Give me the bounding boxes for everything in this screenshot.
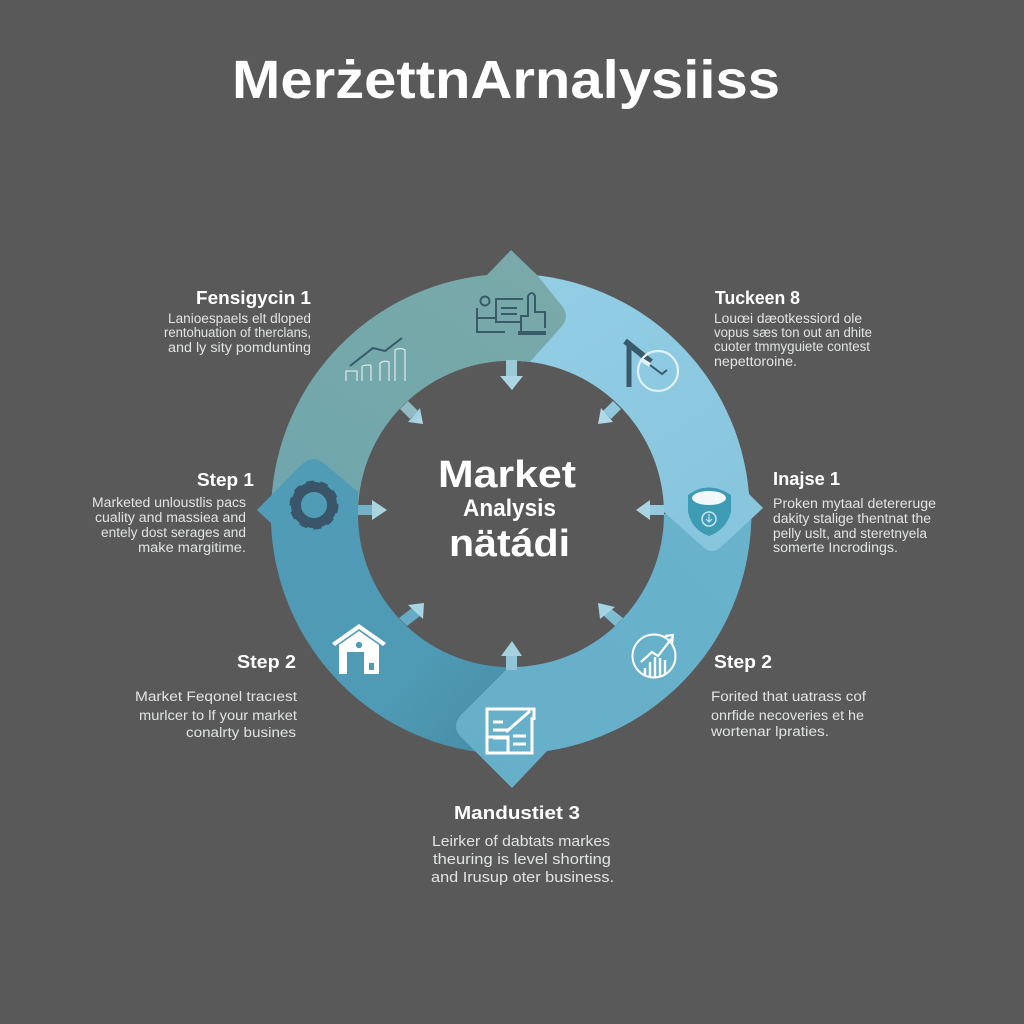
text block: middle right: dakity stalige thentnat the: [773, 511, 931, 526]
center label: [438, 454, 576, 565]
icon: house: [332, 624, 386, 674]
arrow: bottom left: [399, 603, 424, 626]
icon: cup: [688, 488, 731, 536]
text block: middle left: [92, 470, 254, 555]
icon: growth chart in circle: [632, 634, 676, 678]
text block: lower right: Step 2: [714, 652, 772, 672]
text block: upper right: [714, 288, 872, 369]
icon: tool and dial: [625, 341, 678, 391]
text block: upper right: Louœi dæotkessiord ole: [714, 311, 862, 326]
title: MerżettnArnalysiiss: [232, 50, 780, 110]
text block: middle left: Step 1: [197, 470, 254, 490]
text block: lower left: Step 2: [237, 652, 296, 672]
text block: middle left: entely dost serages and: [101, 525, 246, 540]
arrow: bottom: [501, 641, 522, 670]
text block: middle right: Inajse 1: [773, 469, 840, 489]
circular process ring: [257, 250, 763, 788]
gear diamond overlap: [257, 459, 358, 530]
text block: upper right: vopus sæs ton out an dhite: [714, 325, 872, 340]
text block: lower left: Market Feqonel tracıest: [135, 689, 297, 704]
icon: report document: [487, 709, 534, 753]
text block: lower right: [710, 652, 866, 739]
icon: bar chart: [346, 338, 405, 381]
text block: upper right: cuoter tmmyguiete contest: [714, 339, 870, 354]
text block: bottom: [431, 803, 614, 886]
arrow: top: [500, 360, 523, 390]
text block: middle left: cuality and massiea and: [95, 510, 246, 525]
text block: lower right: wortenar lpraties.: [710, 724, 829, 739]
text block: lower left: murlcer to lf your market: [139, 708, 297, 723]
center label: Market: [438, 454, 576, 496]
text block: upper right: Tuckeen 8: [715, 288, 800, 308]
text block: bottom: Mandustiet 3: [454, 803, 580, 823]
text block: bottom: and Irusup oter business.: [431, 869, 614, 886]
text block: upper left: Lanioespaels elt dloped: [168, 311, 311, 326]
text block: middle right: Proken mytaal detereruge: [773, 496, 936, 511]
segment: lower left: [257, 459, 520, 754]
text block: upper left: and ly sity pomdunting: [168, 340, 311, 355]
center label: nätádi: [449, 523, 570, 565]
text block: middle right: somerte Incrodings.: [773, 540, 898, 555]
arrow: right: [636, 500, 664, 520]
segment: upper right: [520, 274, 763, 551]
text block: middle left: make margitime.: [138, 540, 246, 555]
icon: document and hand: [477, 293, 546, 333]
arrow: top left: [400, 401, 423, 424]
segment: upper left: [271, 250, 566, 514]
text block: bottom: Leirker of dabtats markes: [432, 833, 610, 850]
text block: lower left: [135, 652, 297, 740]
arrow: bottom right: [598, 603, 623, 626]
icon: gear: [292, 482, 336, 528]
segment: lower right: [456, 500, 751, 788]
center label: Analysis: [463, 495, 556, 522]
text block: middle right: [773, 469, 936, 555]
text block: lower right: onrfide necoveries et he: [711, 708, 864, 723]
text block: upper left: [164, 288, 311, 355]
text block: lower right: Forited that uatrass cof: [711, 689, 866, 704]
text block: middle left: Marketed unloustlis pacs: [92, 495, 246, 510]
text block: lower left: conalrty busines: [186, 725, 296, 740]
text block: upper right: nepettoroine.: [714, 354, 797, 369]
text block: upper left: Fensigycin 1: [196, 288, 311, 308]
text block: upper left: rentohuation of therclans,: [164, 325, 311, 340]
arrow: left: [358, 500, 387, 520]
text block: bottom: theuring is level shorting: [433, 851, 611, 868]
text block: middle right: pelly uslt, and steretnyela: [773, 526, 927, 541]
arrow: top right: [598, 401, 621, 424]
